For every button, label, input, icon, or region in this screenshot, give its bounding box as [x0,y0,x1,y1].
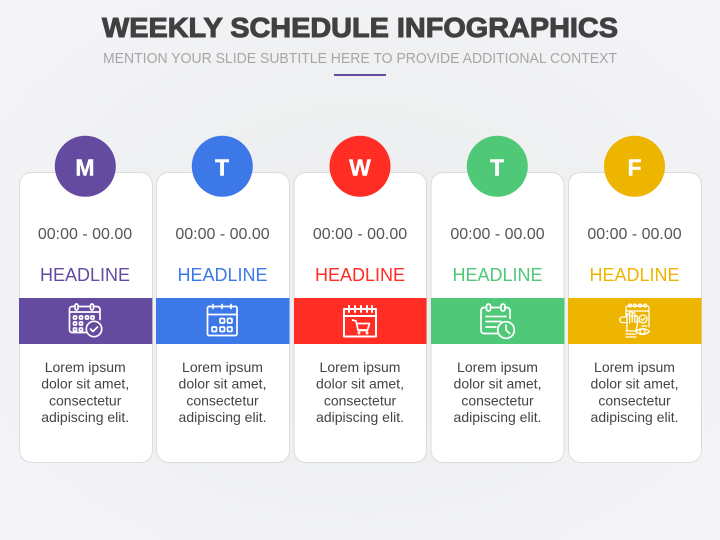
headline: Tuesday: HEADLINE [177,265,268,285]
panel: Tuesday: adipiscing elit. [179,409,266,425]
card: Wednesday [294,172,426,462]
day letter: T: T [490,154,504,180]
day circle: W [330,136,390,197]
panel: Wednesday: dolor sit amet, [316,376,404,392]
panel: Thursday: consectetur [461,392,534,408]
description: Thursday: Lorem ipsum [457,359,538,375]
day letter: M: M [75,154,95,180]
band: Friday [568,298,702,344]
day letter: F: F [627,154,642,180]
icon: hand, planner and eye [620,304,650,337]
day circle: T [467,136,528,197]
panel: Wednesday: consectetur [324,392,397,408]
band: Thursday [431,298,564,344]
panel: Monday [19,136,152,463]
band: Tuesday [156,298,290,344]
time: Tuesday: 00:00 - 00.00 [175,226,270,243]
time: Wednesday: 00:00 - 00.00 [313,226,407,243]
day letter: T: T [215,154,229,180]
icon: calendar with check [70,304,102,337]
panel: Wednesday: adipiscing elit. [316,409,404,425]
panel: Monday: adipiscing elit. [41,409,129,425]
panel: Thursday: dolor sit amet, [454,376,541,392]
panel: Thursday [431,136,564,463]
panel: Tuesday [156,136,290,463]
panel: Friday: adipiscing elit. [591,409,678,425]
headline: Monday: HEADLINE [40,265,130,285]
panel: Thursday: adipiscing elit. [454,409,541,425]
panel: Friday: dolor sit amet, [591,376,678,392]
card: Thursday [431,172,564,462]
icon: calendar grid [208,304,237,336]
subtitle: MENTION YOUR SLIDE SUBTITLE HERE TO PROVIDE ADDITIONAL CONTEXT [103,50,617,67]
day circle: T [192,136,253,197]
headline: Thursday: HEADLINE [452,265,543,285]
day letter: W: W [349,154,371,180]
description: Friday: Lorem ipsum [594,359,675,375]
panel: Friday [568,136,702,463]
description: Monday: Lorem ipsum [45,359,126,375]
band: Wednesday [294,298,426,344]
headline: Friday: HEADLINE [589,265,680,285]
panel: Monday: dolor sit amet, [41,376,129,392]
description: Tuesday: Lorem ipsum [182,359,263,375]
panel: Tuesday: consectetur [186,392,259,408]
card: Friday [568,172,702,462]
panel: Tuesday: dolor sit amet, [179,376,266,392]
panel: Monday: consectetur [49,392,122,408]
band: Monday [19,298,152,344]
headline: Wednesday: HEADLINE [315,265,405,285]
icon: calendar with shopping cart [344,306,376,336]
time: Thursday: 00:00 - 00.00 [450,226,545,243]
day circle: F [604,136,665,197]
title: WEEKLY SCHEDULE INFOGRAPHICS [102,12,618,43]
day circle: M [55,136,116,197]
time: Monday: 00:00 - 00.00 [38,226,132,243]
icon: calendar with clock [481,304,514,338]
description: Wednesday: Lorem ipsum [320,359,400,375]
card: Monday [20,172,152,462]
time: Friday: 00:00 - 00.00 [587,226,682,243]
title underline [334,74,386,76]
panel: Wednesday [294,136,426,463]
panel: Friday: consectetur [598,392,671,408]
card: Tuesday [156,172,290,462]
